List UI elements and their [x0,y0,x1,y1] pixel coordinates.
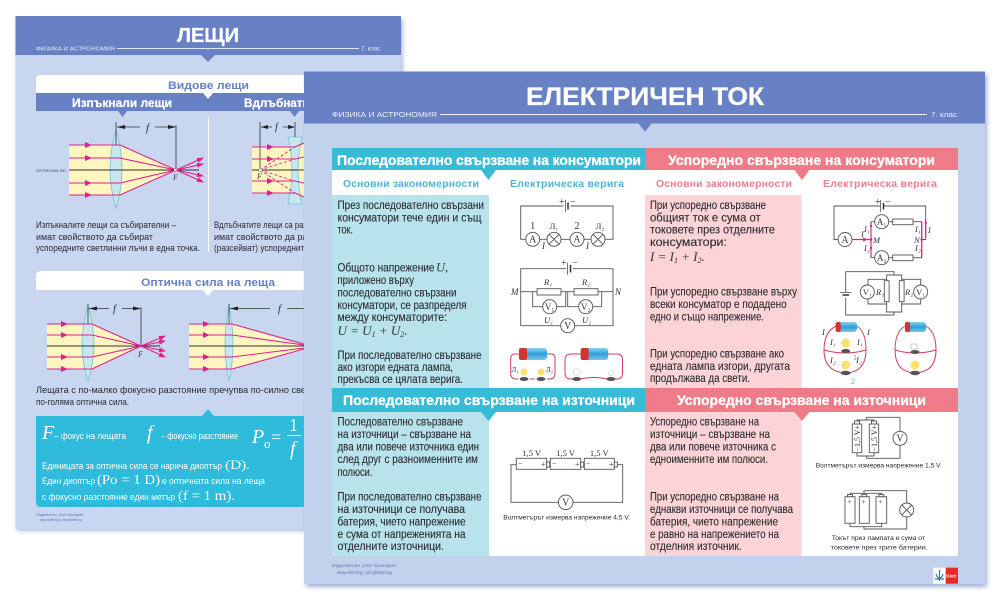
circuit: two batteries in parallel: −1,5 V+ [853,425,862,452]
circuit: series voltmeters: V₁ [545,302,555,312]
circuit: series voltmeters: R₂ [581,277,590,287]
back poster: lenses [16,16,403,531]
diagram: short focus lens [47,304,165,381]
illustration: parallel lamps: 1 [853,353,857,362]
circuit: three batteries in series: 1,5 V [556,448,576,458]
grade label: 7. клас [361,46,380,52]
text: diopter definition: (D). [225,457,250,472]
text: series sources: При последователно свързване [338,490,482,504]
text: series sources: на източници – свързване на [338,427,471,441]
formula: focus definitions: – фокусно разстояние [161,431,238,441]
text: convex lenses: Изпъкналите лещи са събирателни – [36,220,177,231]
diagram: concave lens [252,122,304,204]
diagram: convex lens: F [172,173,178,182]
circuit: series voltmeters: U₂ [582,315,591,325]
illustration: parallel lamps: I₂ [855,355,862,365]
illustration: parallel lamps: I₂ [829,355,836,365]
text: parallel laws: 2 [698,256,702,265]
circuit: two batteries in parallel [816,417,942,470]
circuit: series voltmeters: N [614,287,622,297]
formula: optical power: o [264,436,270,451]
caption: voltmeter 4.5 V: Волтметърът измерва напрежение 4,5 V. [503,514,630,522]
text: parallel laws: консуматори: [650,235,727,249]
circuit: three batteries in series: 1,5 V [590,448,610,458]
text: series laws: консуматори тече един и същ [338,210,482,224]
circuit: series lamps: − [570,197,576,208]
subheading: circuit: Електрическа верига [823,178,937,190]
grade label: 7. клас [931,110,957,119]
text: series laws: През последователно свързани [338,198,484,212]
circuit: series voltmeters: V₂ [581,302,591,312]
header band: lenses [16,16,401,62]
text: concave lenses: Вдлъбнатите лещи са разсейвателни – [214,220,355,231]
circuit: parallel voltmeters [840,272,928,315]
text: parallel sources: два или повече източника с [650,440,776,454]
circuit: three batteries in series: + [541,460,546,469]
circuit: three batteries in series: + [609,460,614,469]
text: parallel sources: батерия, чието напрежение [650,515,778,529]
text: diopter definition: Един диоптър [42,476,95,486]
text: series laws: прекъсва се цялата верига. [338,372,463,386]
circuit: parallel ammeters: I [927,225,932,235]
text: diopter definition: (Pо = 1 D) [97,473,160,488]
circuit: series lamps: Л₁ [550,221,558,231]
circuit: series lamps: 1 [530,221,535,232]
circuit: series voltmeters: M [510,287,519,297]
text: parallel sources: Успоредно свързване на [650,415,759,429]
circuit: two batteries in parallel: −1,5 V+ [870,425,879,452]
publisher note: back poster [37,513,85,522]
text: parallel sources [650,415,793,553]
heading: concave lenses: Вдлъбнати лещи [244,98,344,110]
text: parallel laws: I = I [650,249,674,264]
text: parallel laws: При успоредно свързване ако [650,346,784,360]
circuit: series lamps: I [585,241,590,251]
text: parallel sources: еднакви източници се получава [650,502,793,516]
text: convex lenses: успоредните светлинни лъчи в една точка. [36,243,200,254]
circuit: series voltmeters: U₁ [544,315,553,325]
text: parallel laws: едно и също напрежение. [650,310,764,324]
logo: Klett: Klett [946,574,957,578]
circuit: two batteries in parallel: V [896,434,904,444]
text: diopter definition: (f = 1 m). [178,489,235,504]
text: series sources: отделните източници. [338,539,444,553]
circuit: parallel ammeters: M [872,235,881,245]
subject label: ФИЗИКА И АСТРОНОМИЯ [332,110,437,119]
text: concave lenses: (разсейват) успоредните светлинни лъчи. [214,243,374,254]
illustration: series lamps working and burned: Л₁ [512,366,519,374]
panel: optical power [36,271,380,408]
illustration: parallel lamps: I [866,327,871,337]
text: optical power [36,385,367,408]
circuit: series voltmeters: V [564,321,572,332]
heading: series sources: Последователно свързване на източници [343,392,635,408]
text: series laws: Общото напрежение [338,260,435,274]
subheading: circuit: Електрическа верига [510,178,624,190]
text: convex lenses: имат свойството да събират [36,232,154,243]
circuit: three batteries in series: V [562,498,570,509]
text: parallel laws: всеки консуматор е подадено [650,297,787,311]
title: lenses: ЛЕЩИ [177,25,239,47]
text: series sources: е сума от напреженията на [338,527,466,541]
text: series sources: на източници се получава [338,502,465,516]
text: parallel sources: източници – свързване на [650,427,770,441]
illustration: parallel lamps: I [821,327,826,337]
circuit: parallel ammeters: I [860,229,865,239]
text: optical power: Лещата с по-малко фокусно разстояние пречупва по-силно светлината и има [36,385,367,396]
formula: focus definitions: f [147,422,155,444]
diagram: long focus lens: f [278,304,283,315]
text: series sources [338,415,482,553]
illustration: parallel lamps: 2 [851,377,855,386]
panel: series consumers [332,148,645,388]
text: series sources: полюси. [338,465,372,479]
formula: focus definitions [41,422,238,444]
circuit: parallel ammeters: I₁ [914,224,921,234]
subheading: basic laws: Основни закономерности [343,178,479,190]
panel: series sources [332,388,645,556]
circuit: parallel voltmeters: V₁ [863,287,872,297]
text: parallel sources: едноименните им полюси. [650,452,768,466]
text: series laws: . [404,323,407,338]
text: series laws: ток. [338,222,353,236]
illustration: parallel lamps [821,322,936,386]
circuit: three batteries and lamp: + [878,498,882,506]
text: series laws: U, [436,260,448,274]
diagram: short focus lens: f [113,304,118,315]
text: diopter definition: Единицата за оптична сила се нарича диоптър [42,461,222,471]
text: diopter definition [42,457,265,504]
circuit: three batteries and lamp: + [848,498,852,506]
text: series laws: между консуматорите: [338,310,447,324]
publisher note: front poster [332,563,398,575]
publisher note: front poster: Издателство „Клет България“ [332,563,398,568]
text: parallel laws [649,198,798,385]
circuit: parallel voltmeters: V₁ [916,287,925,297]
text: series laws: ако изгори едната лампа, [338,360,453,374]
text: series sources: батерия, чието напрежение [338,515,466,529]
diagram: concave lens: F [256,172,262,181]
circuit: parallel ammeters: − [885,197,891,208]
caption: lamp current: токовете през трите батерии. [831,543,928,551]
publisher note: back poster: www.klett.bg | info@klett.bg [40,518,82,522]
white content base [332,148,958,556]
circuit: series lamps: Л₂ [596,221,604,231]
text: series laws: последователно свързани [338,286,457,300]
formula: optical power: f [290,438,298,460]
circuit: three batteries in series: − [586,460,591,468]
diagram: long focus lens [189,304,310,381]
panel: formula box [36,409,380,507]
panel: parallel sources [645,388,958,556]
diagram: convex lens: f [146,122,151,134]
text: concave lenses [214,220,374,254]
circuit: parallel ammeters: A [841,235,849,246]
formula: optical power: = [271,427,281,447]
circuit: parallel ammeters: + [875,197,881,208]
circuit: series lamps: + [559,197,565,208]
panel: lens types [36,75,380,254]
circuit: three batteries in series: + [575,460,580,469]
text: parallel laws: . [702,249,705,264]
header band: electric current [304,72,985,132]
diagram: convex lens [36,122,203,208]
caption: lamp current [831,535,928,551]
circuit: series lamps [521,197,613,251]
text: parallel laws: общият ток е сума от [650,210,761,224]
title: electric current: ЕЛЕКТРИЧЕН ТОК [526,83,765,111]
text: concave lenses: имат свойството да разсейват [214,232,340,243]
illustration: series lamps working and burned [511,348,622,381]
caption: lamp current: Токът през лампата е сума от [832,535,925,542]
text: parallel sources: При успоредно свързване на [650,490,779,504]
text: series sources: след друг с разноименните им [338,452,478,466]
text: series sources: Последователно свързване [338,415,463,429]
text: parallel laws: При успоредно свързване върху [650,284,798,298]
circuit: three batteries in series: − [518,460,523,468]
heading: lens types: Видове лещи [168,80,249,92]
circuit: series lamps: I [541,241,546,251]
label: optical axis: оптична ос [36,169,67,174]
circuit: series lamps: A [573,234,581,246]
circuit: parallel ammeters: I₂ [914,243,921,253]
front poster: electric current [304,72,987,587]
text: parallel sources: е равно на напрежението на [650,527,779,541]
heading: parallel sources: Успоредно свързване на източници [677,392,926,408]
illustration: series lamps working and burned: Л₂ [546,366,554,374]
publisher note: back poster: Издателство „Клет България“ [37,513,85,517]
text: series laws: + U [376,323,402,338]
circuit: parallel voltmeters: R₁ [875,287,884,297]
illustration: parallel lamps: I₁ [856,337,863,347]
circuit: three batteries and lamp [831,491,928,551]
circuit: three batteries in series: 1,5 V [522,448,542,458]
circuit: three batteries in series [503,448,630,522]
text: parallel laws: При успоредно свързване [650,198,766,212]
formula: focus definitions: – фокус на лещата [54,431,126,441]
circuit: three batteries in series: − [552,460,557,468]
subheading: basic laws: Основни закономерности [656,178,792,190]
formula: focus definitions: F [41,422,55,444]
caption: voltmeter 1.5 V: Волтметърът измерва напрежение 1,5 V. [816,463,942,470]
panel: parallel consumers [645,148,958,388]
circuit: series voltmeters [510,258,622,333]
subject label: ФИЗИКА И АСТРОНОМИЯ [36,46,115,52]
circuit: parallel voltmeters: R₂ [904,287,913,297]
text: parallel laws: 1 [674,256,678,265]
circuit: series voltmeters: + [561,258,567,269]
heading: parallel consumers: Успоредно свързване на консуматори [668,152,935,168]
circuit: series voltmeters: − [572,258,578,269]
publisher note: front poster: www.klett.bg | info@klett.bg [337,570,393,575]
circuit: parallel ammeters: I₂ [863,243,870,253]
text: series laws: 1 [372,330,376,339]
text: series laws: 2 [400,330,404,339]
text: parallel sources: отделния източник. [650,539,742,553]
circuit: parallel ammeters: N [913,235,921,245]
circuit: series lamps: 2 [574,221,580,232]
illustration: parallel lamps: I₁ [829,337,836,347]
text: series laws: При последователно свързване [338,348,482,362]
circuit: three batteries and lamp: + [862,498,866,506]
circuit: parallel ammeters: I₁ [863,224,870,234]
circuit: parallel ammeters: A₂ [877,253,887,263]
formula: optical power: 1 [289,415,298,435]
diagram: short focus lens: F [137,350,143,359]
text: diopter definition: е оптичната сила на леща [162,476,265,486]
text: series sources: два или повече източника един [338,440,479,454]
formula: optical power [251,415,301,460]
text: convex lenses [36,220,200,254]
text: series laws: приложено върху [338,273,415,287]
circuit: series lamps: A [529,234,537,246]
heading: optical power: Оптична сила на леща [141,277,276,289]
text: series laws: консуматори, се разпределя [338,298,466,312]
heading: series consumers: Последователно свързване на консуматори [337,152,641,168]
circuit: parallel ammeters [834,197,932,265]
text: diopter definition: с фокусно разстояние един метър [42,492,175,502]
text: series laws [338,198,484,386]
text: parallel laws: едната лампа изгори, другата [650,359,790,373]
circuit: parallel ammeters: A₁ [877,217,887,227]
logo: Klett [933,568,958,584]
heading: convex lenses: Изпъкнали лещи [72,98,172,110]
formula: optical power: P [251,426,264,448]
text: series laws: U = U [338,323,372,338]
text: optical power: по-голяма оптична сила. [36,397,129,408]
circuit: series voltmeters: R₁ [543,277,552,287]
text: parallel laws: + I [678,249,698,264]
text: parallel laws: продължава да свети. [650,371,750,385]
text: parallel laws: токовете през отделните [650,222,775,236]
diagram: concave lens: f [275,122,279,133]
